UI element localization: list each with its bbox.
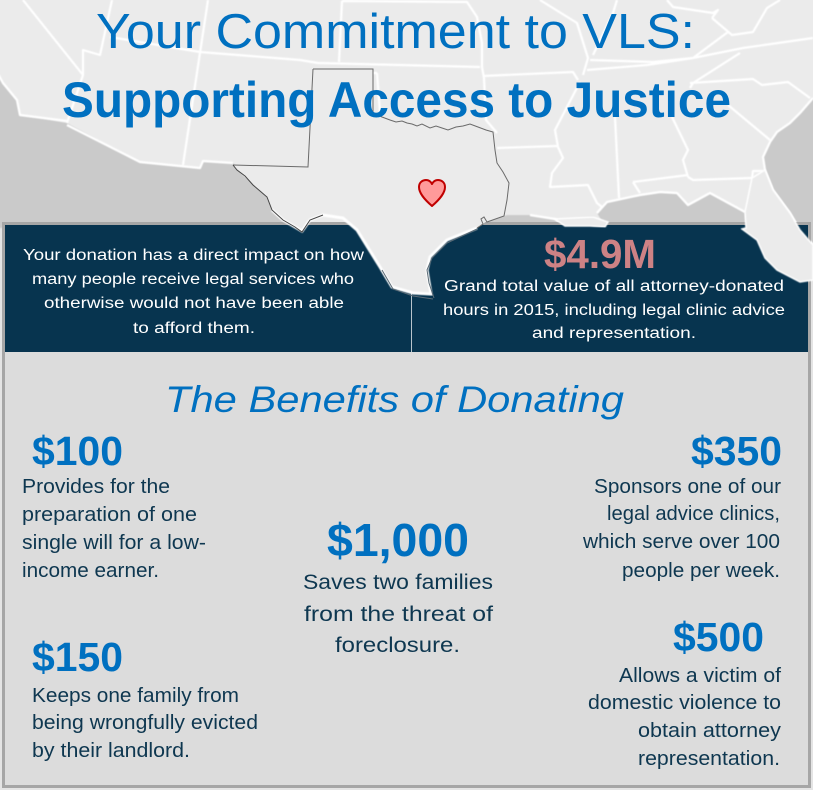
benefit: $500: obtain attorney: [638, 720, 781, 742]
map: Texas state: [233, 69, 509, 299]
background map of southern US states: [0, 0, 813, 252]
benefit: $350: [582, 428, 782, 582]
text block: donation impact: Your donation has a direct impact on how: [23, 247, 365, 264]
benefit: $500: domestic violence to: [588, 692, 781, 714]
icon: heart: [419, 180, 445, 206]
benefit: $150: being wrongfully evicted: [32, 712, 258, 734]
map: Louisiana delta: [555, 217, 608, 227]
statistic: $4.9M attorney-donated hours: and representation.: [532, 325, 696, 342]
benefit: $150: by their landlord.: [32, 740, 190, 762]
map: Florida peninsula: [742, 170, 813, 282]
benefit: $500: $500: [673, 614, 764, 660]
text block: donation impact: otherwise would not have been able: [44, 295, 344, 312]
benefit: $150: $150: [32, 634, 123, 680]
statistic: $4.9M attorney-donated hours: [443, 231, 785, 342]
benefit: $350: people per week.: [622, 560, 780, 582]
title: Your Commitment to VLS:: [96, 5, 695, 59]
benefit: $350: Sponsors one of our: [594, 476, 781, 498]
divider between impact texts: [411, 293, 412, 352]
panel: lower frame: [4, 224, 810, 786]
statistic: $4.9M attorney-donated hours: hours in 2015, including legal clinic advice: [443, 302, 785, 319]
benefit: $100: Provides for the: [22, 476, 170, 498]
benefit: $100: [22, 428, 206, 582]
benefit: $1,000: foreclosure.: [335, 634, 460, 657]
benefit: $100: income earner.: [22, 560, 159, 582]
panel: dark impact band: [5, 225, 808, 352]
benefit: $350: legal advice clinics,: [607, 503, 780, 525]
benefit: $100: preparation of one: [22, 504, 197, 526]
statistic: $4.9M attorney-donated hours: Grand total value of all attorney-donated: [444, 278, 784, 295]
benefit: $1,000: $1,000: [327, 514, 469, 566]
benefit: $100: single will for a low-: [22, 532, 206, 554]
benefit: $350: $350: [691, 428, 782, 474]
benefit: $1,000: [303, 514, 493, 657]
benefit: $150: Keeps one family from: [32, 685, 239, 707]
title: [62, 5, 731, 128]
benefit: $500: representation.: [638, 748, 780, 770]
benefit: $500: [588, 614, 781, 770]
text block: donation impact: many people receive legal services who: [32, 271, 354, 288]
benefit: $100: $100: [32, 428, 123, 474]
benefit: $350: which serve over 100: [582, 531, 780, 553]
text block: donation impact: [23, 247, 365, 337]
benefit: $500: Allows a victim of: [619, 665, 781, 687]
text block: donation impact: to afford them.: [133, 320, 255, 337]
heading: The Benefits of Donating: The Benefits of Donating: [165, 379, 624, 420]
statistic: $4.9M attorney-donated hours: $4.9M: [544, 231, 656, 277]
benefit: $150: [32, 634, 258, 762]
benefit: $1,000: Saves two families: [303, 571, 493, 594]
title: Supporting Access to Justice: [62, 72, 731, 128]
benefit: $1,000: from the threat of: [304, 603, 493, 626]
